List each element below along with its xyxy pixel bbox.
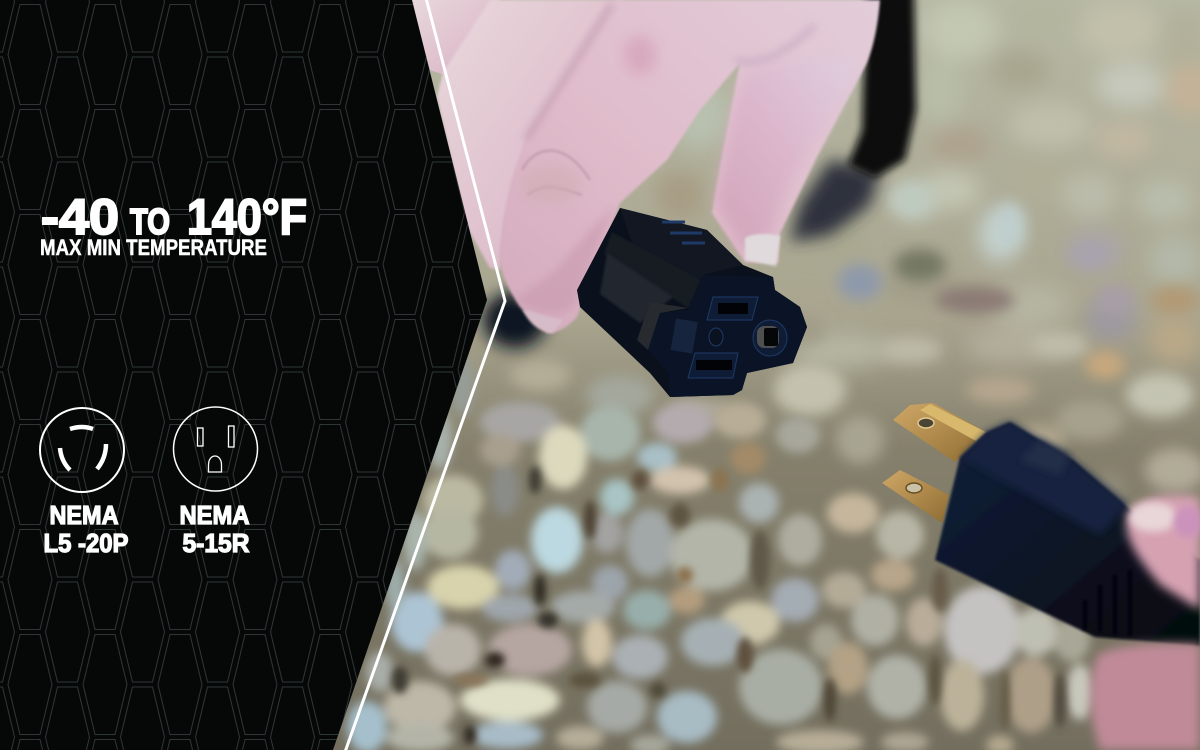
socket side clip [637, 302, 688, 350]
heading: temperature range: TO [130, 201, 170, 242]
heading: temperature range: -40 [41, 189, 119, 245]
photo: dark shadow below hand [483, 292, 547, 348]
heading: temperature range: 140°F [187, 189, 307, 245]
photo: black plug body [935, 422, 1200, 646]
photo: plug prongs [882, 403, 986, 523]
socket rating stamp [671, 318, 698, 354]
label: NEMA 5-15R: 5-15R [182, 528, 250, 558]
socket face [648, 275, 807, 397]
photo: lower finger [1090, 644, 1200, 750]
heading: temperature range [41, 189, 307, 245]
right finger shading [716, 60, 860, 255]
photo: thumb tip highlight [1129, 502, 1177, 532]
label: NEMA L5-20P: NEMA [50, 500, 119, 530]
socket centre screw [709, 328, 723, 346]
photo: thumb purple mark [1174, 506, 1200, 538]
photo: black strap behind hand [790, 0, 916, 242]
finger crease shadow near crotch [735, 25, 815, 62]
right fingernail [745, 234, 780, 266]
socket side band [604, 232, 700, 308]
index finger [437, 0, 625, 270]
knuckle pink mark [624, 35, 656, 75]
crease between fingers [525, 4, 612, 140]
socket hot slot [707, 297, 758, 320]
white chevron line [345, 0, 505, 750]
fingernail tip [522, 309, 563, 333]
label: NEMA L5-20P: L5 -20P [44, 528, 128, 558]
photo: black socket [577, 208, 807, 397]
main finger and back of hand [500, 0, 880, 333]
socket ground hole [753, 320, 787, 356]
label: NEMA L5-20P [44, 500, 128, 558]
socket ridge marks [662, 222, 705, 243]
label: NEMA 5-15R [180, 500, 250, 558]
black hexagon panel [0, 0, 487, 750]
socket top facet [620, 208, 743, 308]
icon: NEMA L5-20P plug [40, 408, 124, 492]
photo: thumb on plug [1127, 495, 1200, 610]
photo: hand holding socket [410, 0, 880, 333]
left finger behind [410, 0, 500, 75]
icon: NEMA 5-15R outlet [174, 407, 258, 491]
socket window [600, 253, 673, 323]
knuckle creases [522, 151, 590, 195]
main finger lower edge shade [515, 205, 615, 314]
text: max min temperature: MAX MIN TEMPERATURE [40, 235, 267, 260]
socket neutral slot [688, 353, 738, 378]
finger pad shade [520, 165, 580, 205]
photo: gravel background [300, 0, 1200, 750]
label: NEMA 5-15R: NEMA [180, 500, 250, 530]
